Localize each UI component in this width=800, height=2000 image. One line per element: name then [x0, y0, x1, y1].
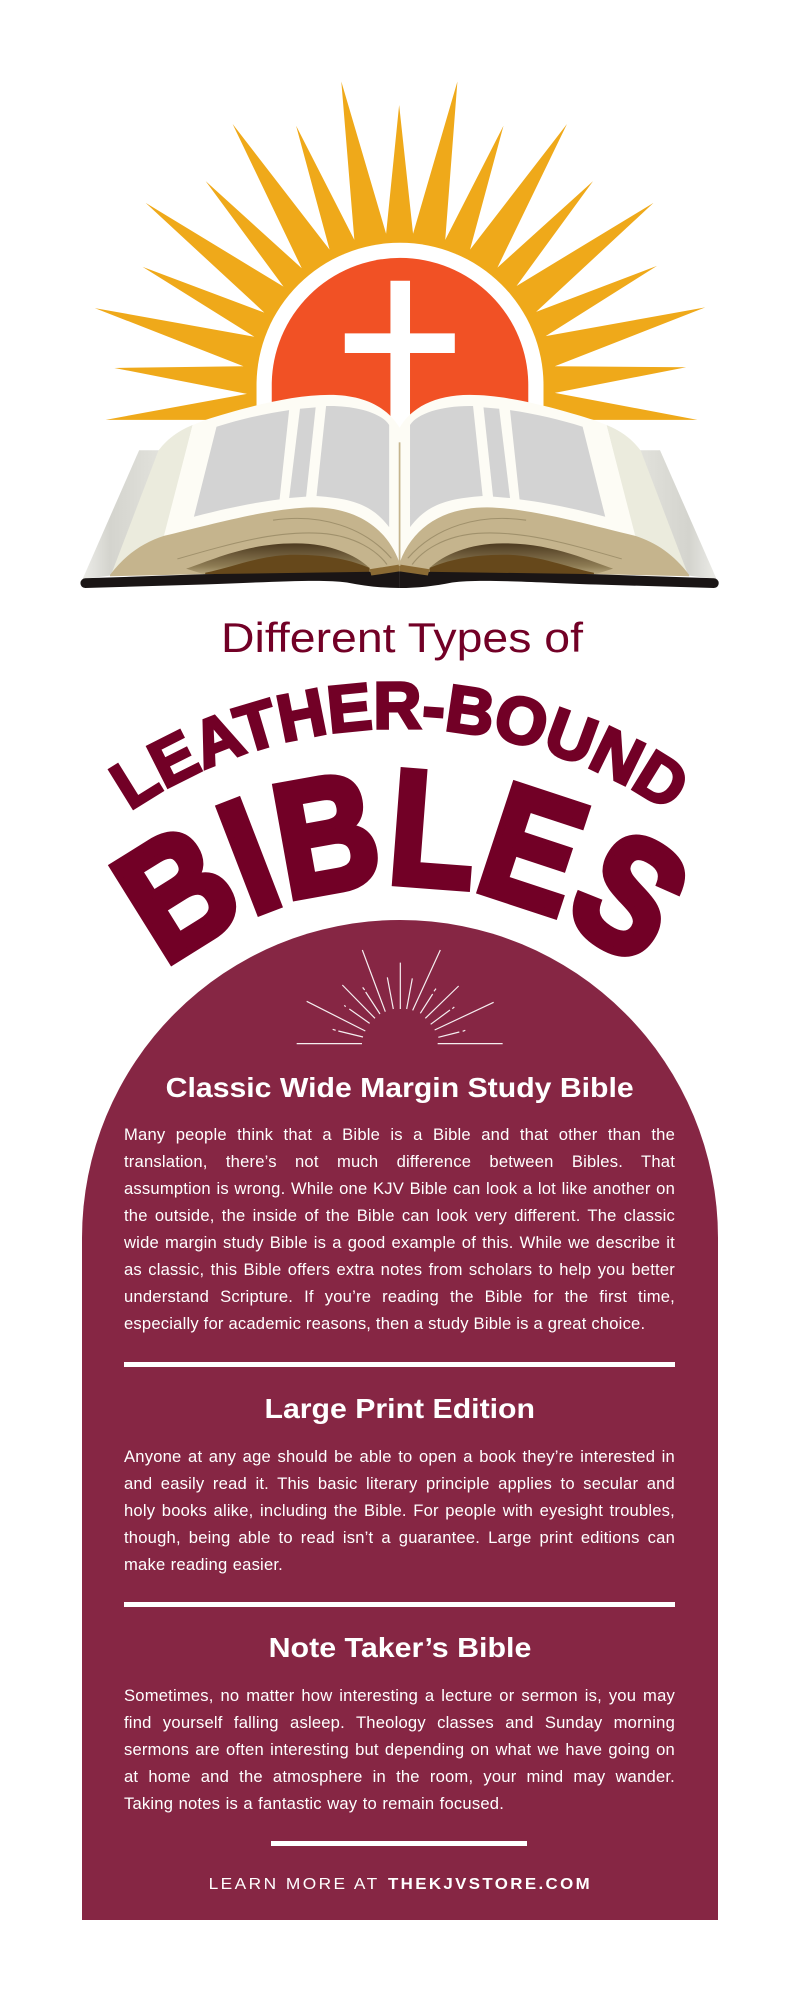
- title: BIBLES curved: [108, 767, 686, 966]
- text block: Note Taker body: [124, 1686, 675, 1813]
- text block: Classic Wide Margin body: understand Scripture. If you’re reading the Bible for the first time,: [124, 1287, 675, 1306]
- icon: sunburst lines: [297, 950, 503, 1044]
- text block: Large Print body: holy books alike, including the Bible. For people with eyesight troubles,: [124, 1501, 675, 1520]
- divider rule 1: [124, 1362, 675, 1367]
- divider rule 3: [271, 1841, 527, 1846]
- text block: Note Taker body: at home and the atmosphere in the room, your mind may wander.: [124, 1767, 675, 1786]
- text block: Classic Wide Margin body: as classic, this Bible offers extra notes from scholars to help you better: [124, 1260, 675, 1279]
- icon: book centre crease: [398, 442, 402, 566]
- text block: Note Taker body: sermons are often interesting but depending on what we have going on: [124, 1740, 675, 1759]
- text block: Classic Wide Margin body: [124, 1125, 675, 1333]
- text block: Classic Wide Margin body: wide margin study Bible is a good example of this. While we describe it: [124, 1233, 675, 1252]
- heading: Note Taker's Bible: Note Taker’s Bible: [269, 1632, 531, 1663]
- title: BIBLES curved: BIBLES: [108, 767, 686, 966]
- text block: Large Print body: make reading easier.: [124, 1555, 283, 1574]
- icon: cross: [345, 281, 455, 434]
- icon: orange sun: [272, 258, 528, 420]
- icon: open book left side: [80, 395, 400, 588]
- text block: Large Print body: though, being able to read isn’t a guarantee. Large print editions can: [124, 1528, 675, 1547]
- text block: Classic Wide Margin body: especially for academic reasons, then a study Bible is a great choice.: [124, 1314, 645, 1333]
- text block: Classic Wide Margin body: translation, there’s not much difference between Bibles. That: [124, 1152, 675, 1171]
- footer: learn more call to action: THEKJVSTORE.COM: [388, 1876, 592, 1893]
- icon: white sun ring: [257, 243, 543, 420]
- title: Different Types of: Different Types of: [221, 614, 583, 661]
- text block: Note Taker body: find yourself falling asleep. Theology classes and Sunday morning: [124, 1713, 675, 1732]
- text block: Classic Wide Margin body: Many people think that a Bible is a Bible and that other than the: [124, 1125, 675, 1144]
- icon: sun rays: [95, 81, 705, 420]
- text block: Note Taker body: Taking notes is a fantastic way to remain focused.: [124, 1794, 504, 1813]
- icon: open book right side: [399, 395, 719, 588]
- title: LEATHER-BOUND curved: LEATHER-BOUND: [108, 681, 685, 810]
- footer: learn more call to action: LEARN MORE AT: [209, 1876, 380, 1893]
- divider rule 2: [124, 1602, 675, 1607]
- panel: burgundy arch: [82, 920, 718, 1920]
- text block: Classic Wide Margin body: assumption is wrong. While one KJV Bible can look a lot like another on: [124, 1179, 675, 1198]
- heading: Large Print Edition: Large Print Edition: [264, 1393, 535, 1424]
- icon: sun and open Bible logo: [80, 81, 719, 588]
- heading: Classic Wide Margin Study Bible: Classic Wide Margin Study Bible: [166, 1072, 634, 1103]
- text block: Note Taker body: Sometimes, no matter how interesting a lecture or sermon is, you may: [124, 1686, 675, 1705]
- text block: Classic Wide Margin body: the outside, the inside of the Bible can look very different. The classic: [124, 1206, 675, 1225]
- text block: Large Print body: and easily read it. This basic literary principle applies to secular and: [124, 1474, 675, 1493]
- text block: Large Print body: Anyone at any age should be able to open a book they’re interested in: [124, 1447, 675, 1466]
- text block: Large Print body: [124, 1447, 675, 1574]
